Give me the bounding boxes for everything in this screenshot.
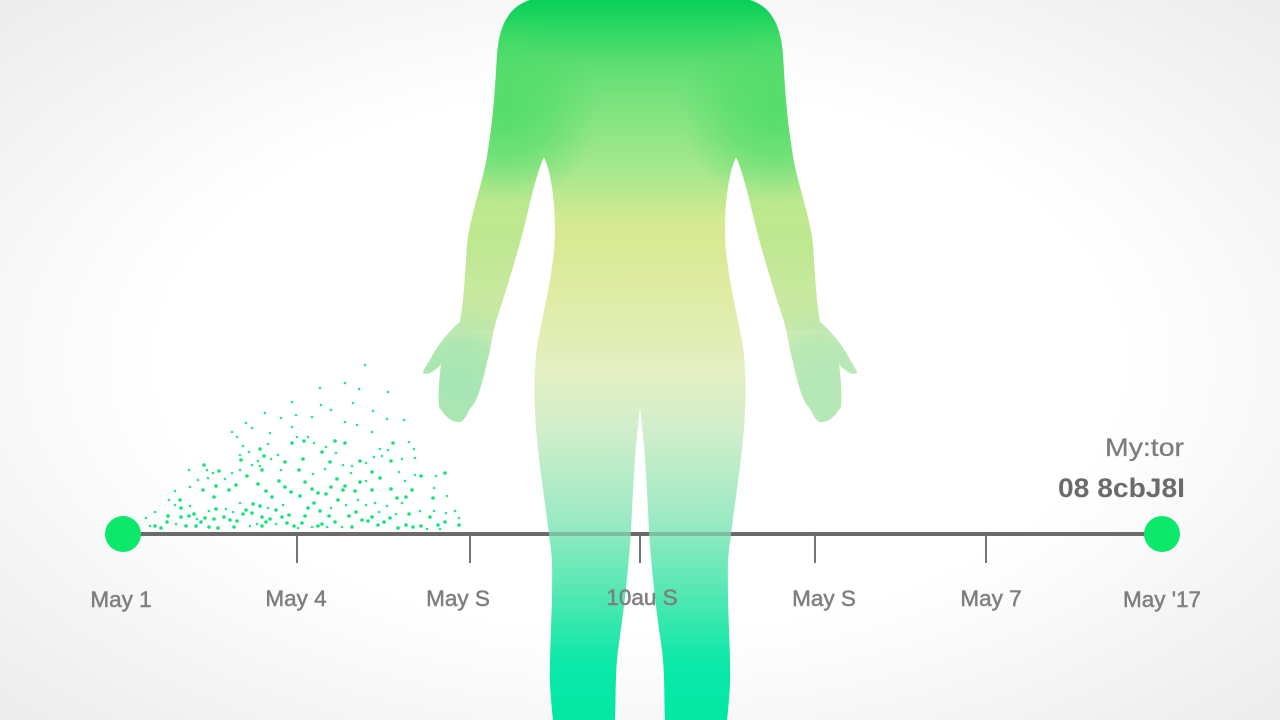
label: 10au S: 10au S [606,585,678,610]
tick: center [639,535,641,563]
start marker [105,516,141,552]
callout: upper text: My:tor [1105,434,1184,462]
tick: May 6 [814,535,816,563]
body silhouette [400,0,880,720]
label: May 1: May 1 [90,587,152,612]
label: May 7: May 7 [960,586,1022,611]
end marker [1144,516,1180,552]
tick: May 5 [469,535,471,563]
label: May S: May S [426,586,490,611]
callout: lower text: 08 8cbJ8I [1058,473,1185,503]
label: May 4: May 4 [265,586,327,611]
tick: May 7 [985,535,987,563]
label: May S: May S [792,586,856,611]
tick: May 4 [296,535,298,563]
dense dots [155,441,459,528]
label: May '17: May '17 [1123,587,1201,612]
small dots [146,365,459,529]
particle cloud [146,365,459,529]
date labels [90,585,1201,612]
timeline axis [138,532,1148,563]
